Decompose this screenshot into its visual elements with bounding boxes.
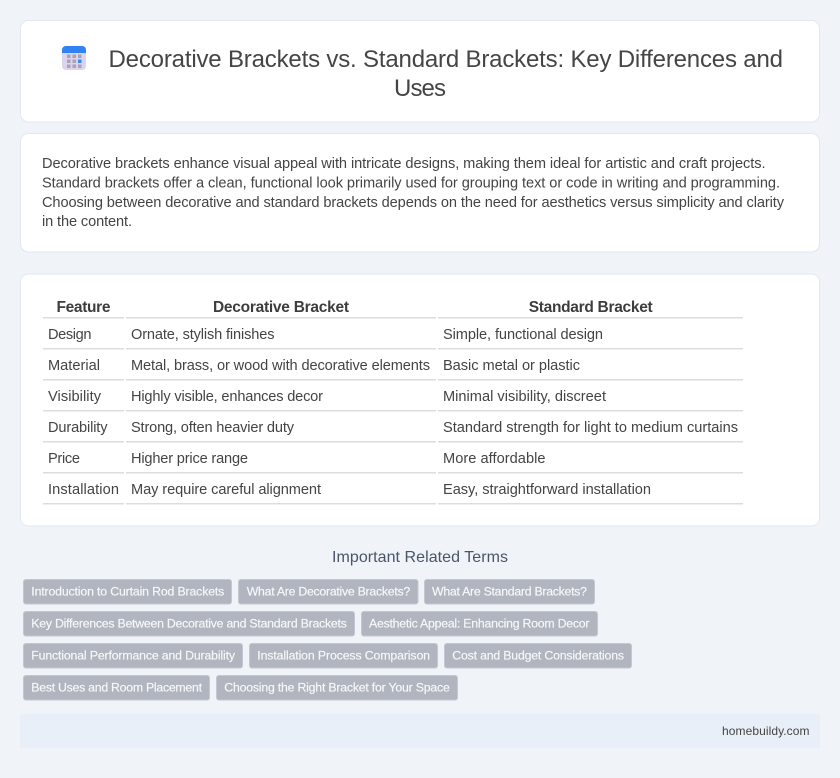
- table row: visibility: Highly visible, enhances decor: [131, 389, 323, 405]
- title: [108, 46, 783, 102]
- icon: calendar: [62, 46, 86, 70]
- tag: [24, 580, 232, 604]
- table row: material: Metal, brass, or wood with decorative elements: [131, 358, 430, 374]
- tag: [362, 612, 598, 636]
- table row: price: More affordable: [443, 451, 546, 467]
- tag: Best Uses and Room Placement: [31, 680, 203, 694]
- table row: visibility: [48, 389, 606, 405]
- table row: durability: [48, 420, 738, 436]
- text block: introduction paragraph: Decorative brackets enhance visual appeal with intricate designs, making them ideal for artistic and craft projects.: [42, 156, 766, 172]
- tag: [24, 612, 354, 636]
- table header: Feature: [56, 299, 111, 316]
- table row: installation: [48, 482, 651, 498]
- tag: [424, 580, 594, 604]
- table header: Standard Bracket: [529, 299, 653, 316]
- table row: design: Simple, functional design: [443, 327, 603, 343]
- tag: [216, 676, 458, 700]
- tag: [444, 644, 632, 668]
- table row: price: Higher price range: [131, 451, 248, 467]
- table row: visibility: Visibility: [48, 389, 102, 405]
- panel: comparison table: [20, 274, 820, 526]
- tag: Introduction to Curtain Rod Brackets: [31, 584, 224, 598]
- table header: Decorative Bracket: [213, 299, 349, 316]
- panel: title card: [20, 20, 820, 122]
- tag: Choosing the Right Bracket for Your Space: [224, 680, 450, 694]
- table row: price: Price: [48, 451, 80, 467]
- table row: design: Design: [48, 327, 92, 343]
- table row: material: [48, 358, 580, 374]
- text block: introduction paragraph: [42, 156, 785, 230]
- panel: introduction: [20, 134, 820, 252]
- tag: [250, 644, 438, 668]
- table row: price: [48, 451, 546, 467]
- panel: related term tags: [24, 580, 632, 700]
- title: Uses: [394, 75, 446, 102]
- tag: What Are Decorative Brackets?: [247, 584, 410, 598]
- heading: important related terms: Important Related Terms: [332, 549, 508, 566]
- title: Decorative Brackets vs. Standard Brackets: Key Differences and: [108, 46, 783, 73]
- table row: design: Ornate, stylish finishes: [131, 327, 274, 343]
- table header: [56, 299, 653, 316]
- table row: installation: Easy, straightforward installation: [443, 482, 651, 498]
- tag: Functional Performance and Durability: [31, 648, 236, 662]
- table row: installation: May require careful alignment: [131, 482, 321, 498]
- table row: durability: Standard strength for light to medium curtains: [443, 420, 738, 436]
- table row: visibility: Minimal visibility, discreet: [443, 389, 606, 405]
- tag: Installation Process Comparison: [257, 648, 430, 662]
- tag: [238, 580, 418, 604]
- table row: material: Material: [48, 358, 100, 374]
- text block: introduction paragraph: Choosing between decorative and standard brackets depends on the need for aesthetics versus simplicity and clarity: [42, 195, 785, 211]
- footer: [20, 714, 820, 748]
- tag: What Are Standard Brackets?: [432, 584, 587, 598]
- table row: durability: Strong, often heavier duty: [131, 420, 295, 436]
- tag: [24, 676, 210, 700]
- tag: [24, 644, 242, 668]
- footer: homebuildy.com: [722, 724, 810, 738]
- tag: Cost and Budget Considerations: [452, 648, 624, 662]
- text block: introduction paragraph: Standard brackets offer a clean, functional look primarily used for grouping text or code in writing and programming.: [42, 176, 780, 192]
- table row: durability: Durability: [48, 420, 108, 436]
- tag: Aesthetic Appeal: Enhancing Room Decor: [369, 616, 590, 630]
- table row: material: Basic metal or plastic: [443, 358, 580, 374]
- table row: design: [48, 327, 603, 343]
- tag: Key Differences Between Decorative and Standard Brackets: [31, 616, 347, 630]
- table row: installation: Installation: [48, 482, 119, 498]
- text block: introduction paragraph: in the content.: [42, 214, 132, 230]
